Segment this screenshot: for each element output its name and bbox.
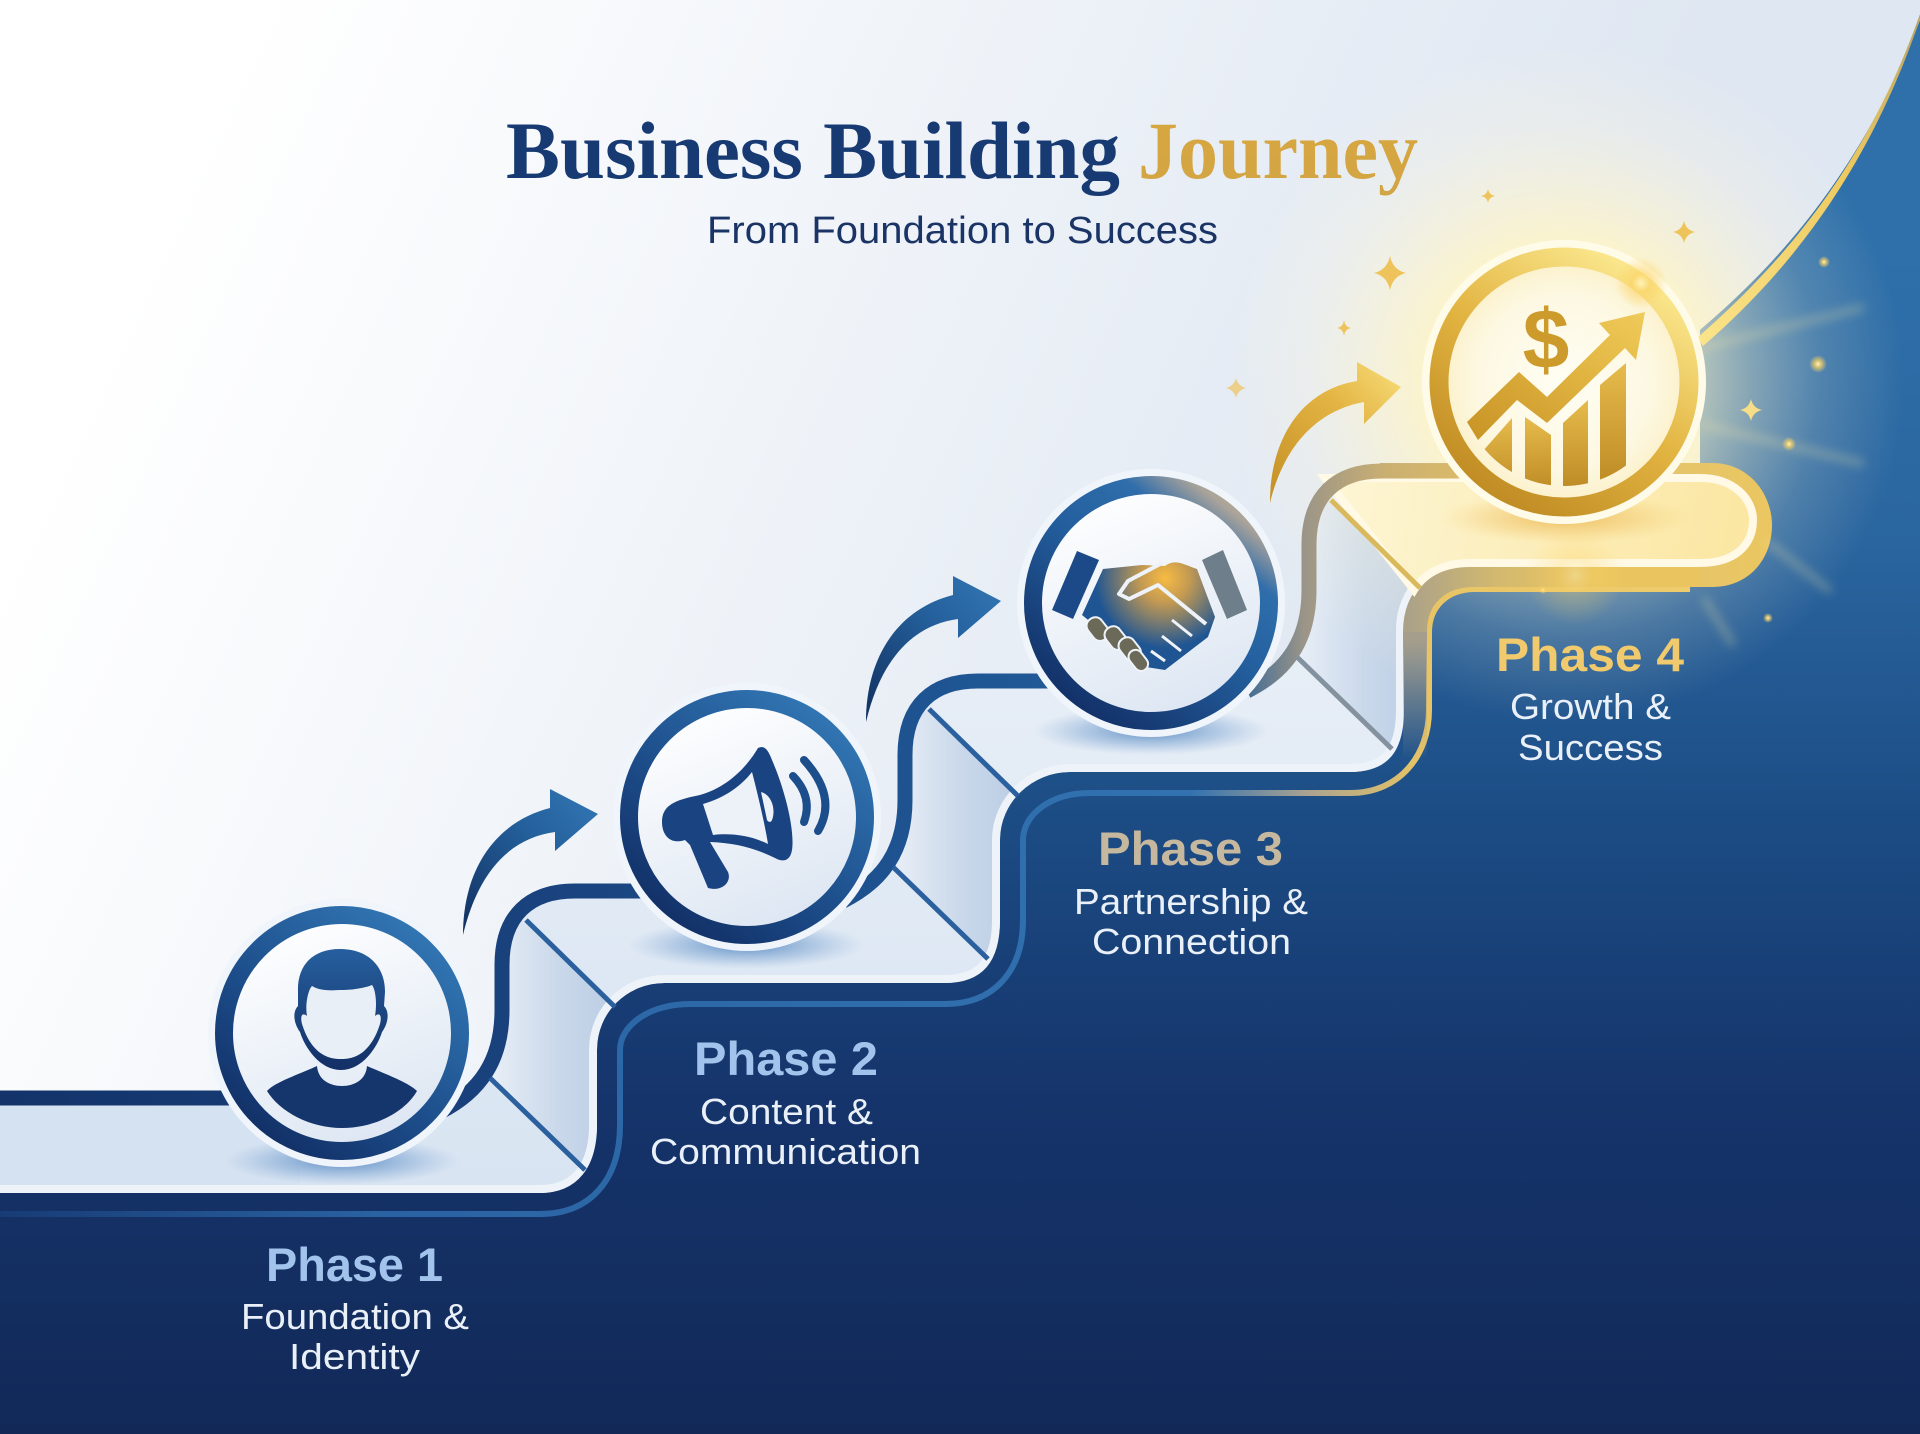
title: Business Building xyxy=(506,105,1120,196)
step top lines xyxy=(0,471,1470,1112)
title xyxy=(506,105,1418,196)
phase 4 label: Success xyxy=(1518,727,1663,768)
tread 1 shading xyxy=(0,1106,300,1194)
arrow: phase 3 to 4 xyxy=(1270,362,1401,503)
phase 4 label: Phase 4 xyxy=(1496,628,1684,681)
phase 2 icon circle xyxy=(613,683,881,951)
arrow: phase 1 to 2 xyxy=(463,789,598,935)
phase 1 label: Phase 1 xyxy=(266,1238,443,1291)
icon: megaphone xyxy=(662,747,825,889)
glow spill over dark area xyxy=(1432,198,1884,704)
phase 4 label xyxy=(1496,628,1684,768)
subtitle: From Foundation to Success xyxy=(707,210,1218,252)
curved gold sweep line xyxy=(1697,14,1920,346)
phase 2 label: Phase 2 xyxy=(694,1032,878,1085)
white rim along step edges xyxy=(0,559,1470,1189)
phase 3 label: Connection xyxy=(1092,921,1291,962)
staircase body xyxy=(0,471,1500,1250)
icon: growth chart xyxy=(1467,306,1645,486)
risers between steps xyxy=(490,499,1422,1170)
icon: growth chart: $ xyxy=(1523,292,1569,386)
phase 4 label: Growth & xyxy=(1510,686,1671,727)
phase 3 label xyxy=(1074,822,1308,962)
phase 3 label: Phase 3 xyxy=(1098,822,1283,875)
icon: person xyxy=(267,949,417,1128)
phase 2 label: Communication xyxy=(650,1131,921,1172)
title: Journey xyxy=(1138,105,1418,196)
phase 2 label: Content & xyxy=(700,1091,873,1132)
phase 3 icon circle xyxy=(1017,469,1285,737)
diagonal step edges xyxy=(490,500,1420,1170)
phase 2 label xyxy=(650,1032,921,1172)
phase 1 label xyxy=(241,1238,469,1377)
platform 4 gold band xyxy=(1325,463,1772,760)
sparkles and light rays xyxy=(1226,189,1861,643)
phase 1 label: Foundation & xyxy=(241,1296,469,1337)
phase 4 icon circle xyxy=(1422,240,1706,524)
phase 3 label: Partnership & xyxy=(1074,881,1308,922)
icon: handshake xyxy=(1052,550,1247,674)
phase 1 icon circle xyxy=(208,899,476,1167)
ring highlight xyxy=(1615,257,1667,309)
platform 4 tread xyxy=(1325,478,1753,590)
circle shadows xyxy=(224,492,1689,1185)
phase 1 label: Identity xyxy=(289,1336,420,1377)
golden light glow behind phase 4 xyxy=(1100,20,1920,740)
inner accent line along steps xyxy=(0,589,1690,1214)
arrow: phase 2 to 3 xyxy=(866,576,1001,722)
